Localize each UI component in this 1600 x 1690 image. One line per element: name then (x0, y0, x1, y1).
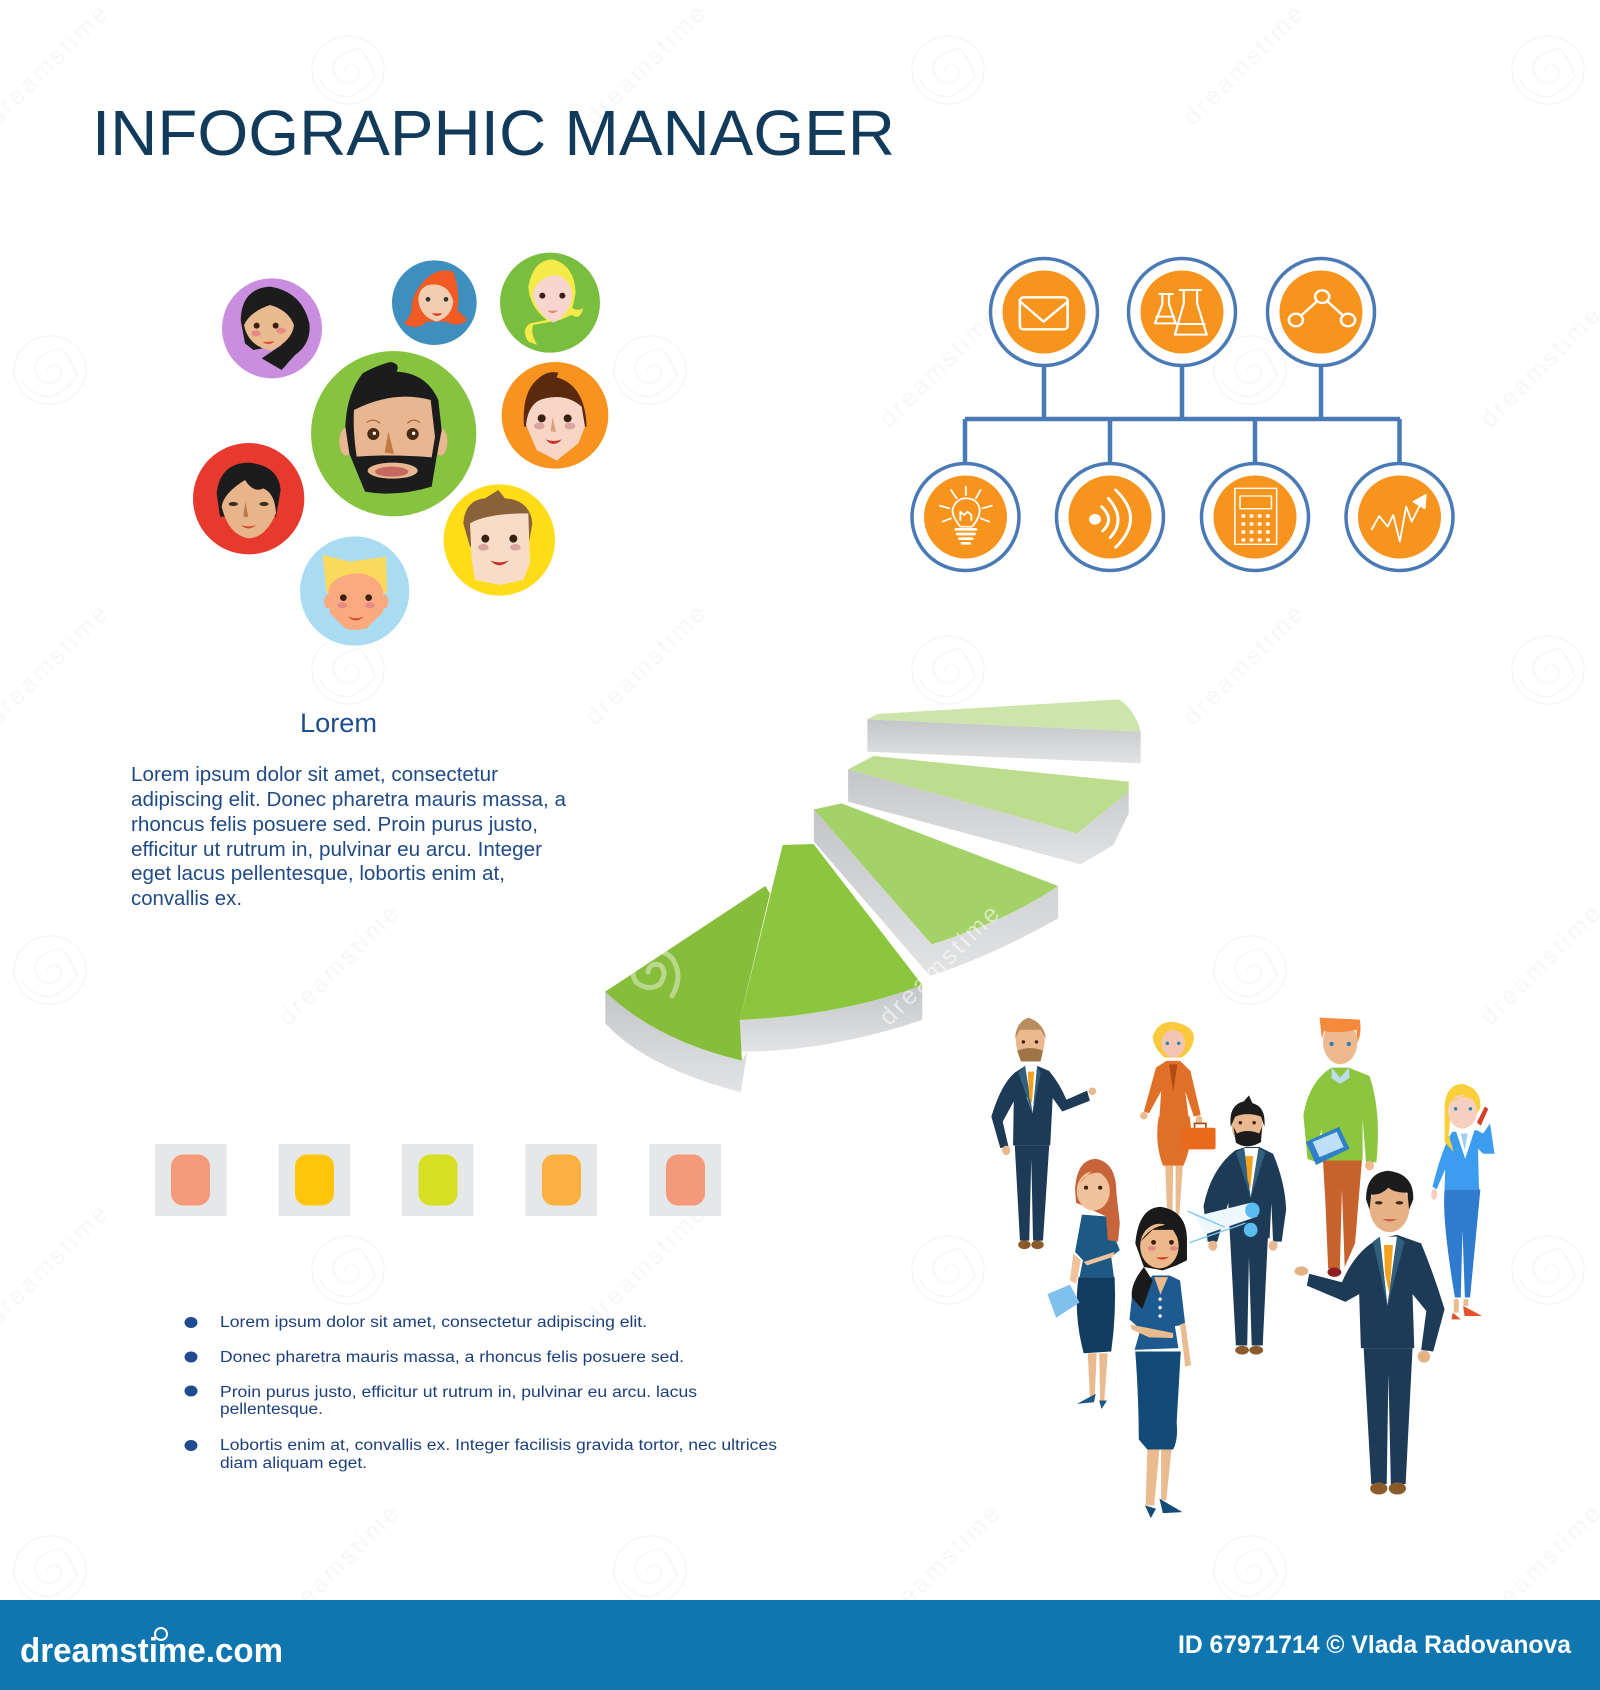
chart: stepped 3D pie segments (605, 699, 1141, 1092)
footer logo: dreamstime.com (20, 1632, 283, 1670)
person: man in green sweater with clipboard (1303, 1018, 1378, 1277)
title: INFOGRAPHIC MANAGER (92, 97, 895, 169)
segment 2 (848, 756, 1129, 864)
text: dreamstime (580, 598, 713, 731)
icon: signal (1091, 490, 1130, 547)
text: dreamstime (580, 0, 713, 131)
icon: man with brown hair on yellow (444, 484, 555, 596)
bullet 2: Donec pharetra mauris massa, a rhoncus felis posuere sed. (220, 1349, 684, 1366)
text: dreamstime (1178, 0, 1311, 131)
icon: light bulb (940, 487, 992, 543)
text block: paragraph: convallis ex. (131, 887, 242, 910)
bullet 4: Lobortis enim at, convallis ex. Integer facilisis gravida tortor, nec ultrices (220, 1437, 777, 1454)
icon: flasks (1155, 290, 1207, 335)
icon: woman with black hair on purple (222, 278, 322, 378)
icon: man with black hair on red (193, 443, 304, 554)
icon: envelope (1020, 297, 1068, 329)
footer credit: ID 67971714 © Vlada Radovanova (1178, 1631, 1572, 1659)
connector lines (965, 365, 1400, 465)
panel: business team (991, 1018, 1495, 1518)
text block: paragraph: adipiscing elit. Donec pharetra mauris massa, a (131, 788, 567, 811)
panel: colour swatches (155, 1144, 721, 1216)
text: dreamstime (874, 300, 1007, 433)
icon: woman with brown hair on orange (502, 362, 608, 469)
text block: paragraph: eget lacus pellentesque, lobortis enim at, (131, 862, 505, 885)
person: man top left in dark suit (991, 1018, 1096, 1249)
text: dreamstime (273, 898, 406, 1031)
icon: blonde woman on green (500, 253, 600, 353)
bullet 1: Lorem ipsum dolor sit amet, consectetur adipiscing elit. (220, 1314, 647, 1331)
bullet 3 (184, 1384, 697, 1418)
text: dreamstime (273, 1498, 406, 1631)
person: bearded man in centre with tubes (1188, 1095, 1286, 1355)
person: blonde woman in blue on phone (1431, 1084, 1495, 1319)
icon: woman with red hair on blue (392, 260, 477, 345)
swatch 1 (155, 1144, 226, 1216)
swatch 5 (650, 1144, 721, 1216)
icon: calculator (1235, 488, 1277, 544)
bullet 3: pellentesque. (220, 1401, 323, 1418)
text block: paragraph: rhoncus felis posuere sed. Proin purus justo, (131, 813, 538, 836)
orange discs (924, 270, 1441, 558)
heading: Lorem: Lorem (300, 708, 377, 738)
swatch 2 (278, 1144, 350, 1216)
bullet 3: Proin purus justo, efficitur ut rutrum in, pulvinar eu arcu. lacus (220, 1384, 697, 1401)
text block: paragraph (131, 763, 567, 910)
icon: network nodes (1289, 290, 1355, 326)
icon: blond man on light blue (300, 536, 409, 646)
ring and disc: top row (912, 258, 1453, 570)
text: dreamstime (874, 1498, 1007, 1631)
text: dreamstime (874, 898, 1007, 1031)
segment 1 (867, 699, 1141, 763)
segment 4 (740, 844, 922, 1052)
panel: team faces (193, 253, 608, 646)
bullet 4: diam aliquam eget. (220, 1455, 367, 1472)
icon glyphs (940, 290, 1426, 547)
panel: network diagram (912, 258, 1453, 570)
segment 3 (814, 803, 1058, 976)
person: red-haired woman with envelope (1047, 1159, 1120, 1409)
swatch 4 (526, 1144, 597, 1216)
icon: rising chart (1372, 495, 1426, 542)
bullet 4 (184, 1437, 777, 1472)
segment 5 (605, 886, 770, 1092)
swatch 3 (402, 1144, 474, 1216)
person: large man in dark suit, front right (1294, 1171, 1445, 1495)
footer bar (0, 1600, 1600, 1690)
text: dreamstime (580, 1198, 713, 1331)
text block: paragraph: Lorem ipsum dolor sit amet, consectetur (131, 763, 498, 786)
person: black-haired woman in navy (1129, 1207, 1191, 1518)
person: woman in orange suit with bag (1140, 1022, 1216, 1215)
text block: bullet list (184, 1314, 777, 1472)
icon: man with beard on green, main (311, 351, 476, 516)
text: dreamstime (1178, 598, 1311, 731)
text block: paragraph: efficitur ut rutrum in, pulvinar eu arcu. Integer (131, 838, 542, 861)
